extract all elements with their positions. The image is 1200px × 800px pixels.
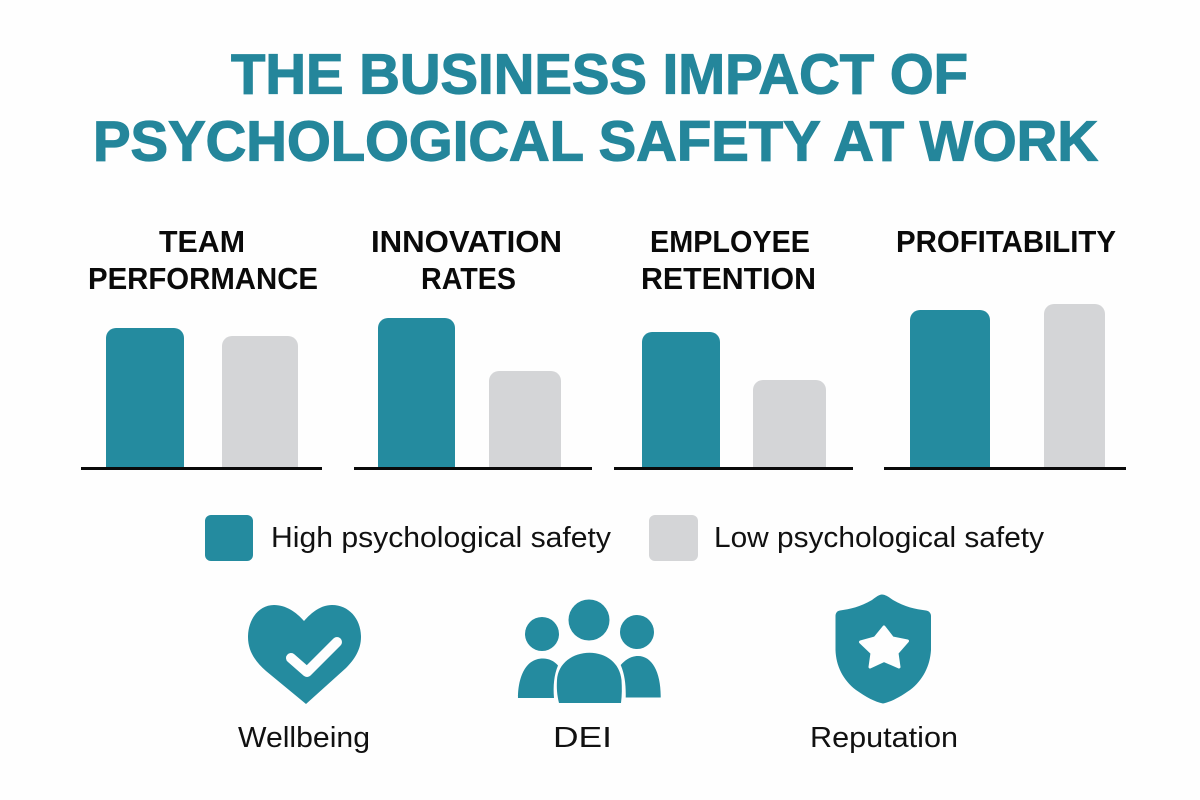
title: THE BUSINESS IMPACT OF [231,42,968,106]
legend swatch: low [649,515,698,561]
heading: employee retention [641,224,816,296]
heading: innovation rates: INNOVATION [371,224,562,259]
heading: profitability: PROFITABILITY [896,224,1116,259]
legend swatch: high [205,515,253,561]
bar: innovation rates high [378,318,455,468]
bar: employee retention high [642,332,720,468]
title [93,42,1098,174]
bar: team performance low [222,336,298,468]
bar: profitability high [910,310,990,468]
panel: profitability [884,224,1126,470]
heading: team performance [88,224,318,296]
heading: employee retention: EMPLOYEE [650,224,810,259]
bar: team performance high [106,328,184,468]
panel: team performance [81,224,322,470]
label: wellbeing: Wellbeing [238,722,370,754]
heading: team performance: PERFORMANCE [88,261,318,296]
label: DEI: DEI [553,722,612,754]
bar: innovation rates low [489,371,561,468]
legend label: low: Low psychological safety [714,522,1045,554]
label: reputation: Reputation [810,722,958,754]
bar: employee retention low [753,380,826,468]
icon: heart with check [248,605,361,704]
title: PSYCHOLOGICAL SAFETY AT WORK [93,110,1098,174]
panel: employee retention [614,224,853,470]
legend [205,515,1045,561]
legend label: high: High psychological safety [271,522,612,554]
icon: people group [518,600,661,703]
heading: employee retention: RETENTION [641,261,816,296]
heading: innovation rates [371,224,562,296]
panel: innovation rates [354,224,592,470]
icon: shield with star [836,594,931,704]
heading: team performance: TEAM [159,224,245,259]
bar: profitability low [1044,304,1105,468]
heading: innovation rates: RATES [421,261,516,296]
